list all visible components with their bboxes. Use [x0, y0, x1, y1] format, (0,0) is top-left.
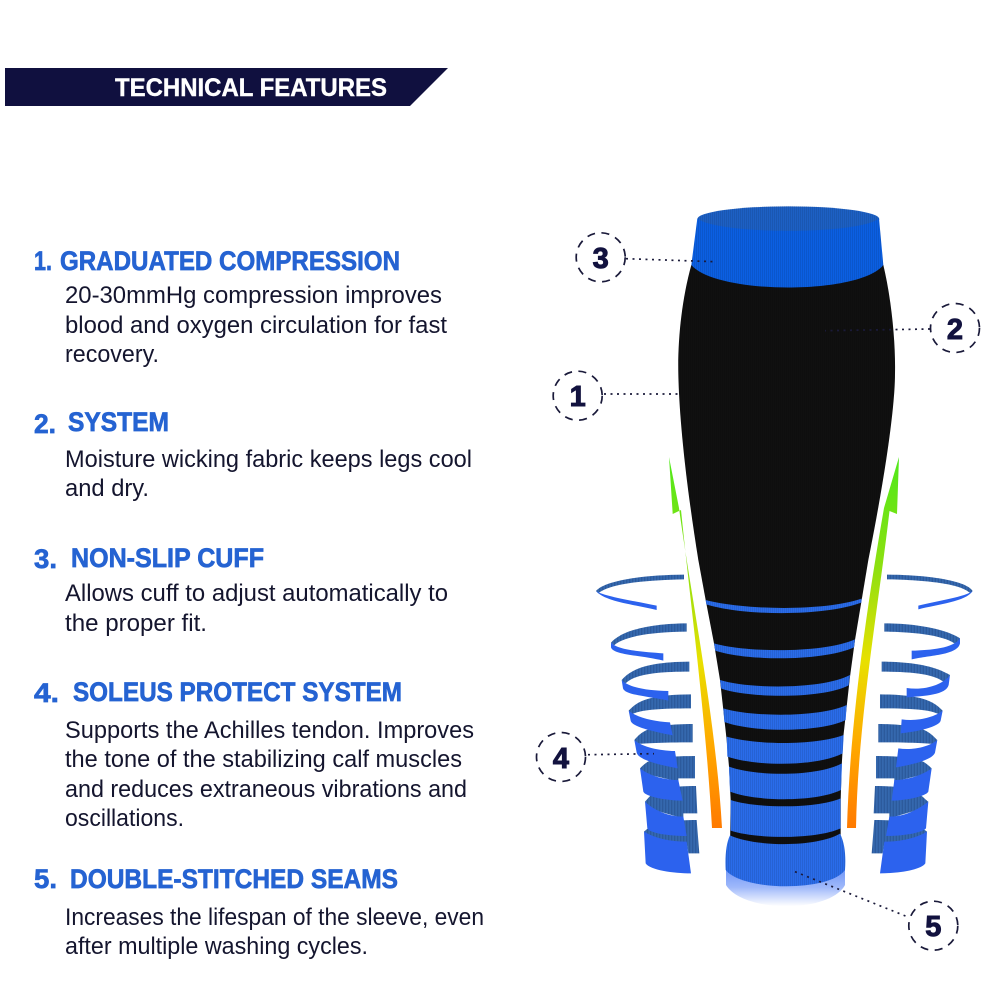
feature 2: system	[34, 407, 472, 502]
callout 1: compression	[553, 371, 678, 420]
feature 4: soleus protect system: and reduces extraneous vibrations and	[65, 776, 467, 803]
feature 5: double-stitched seams: after multiple washing cycles.	[65, 933, 368, 960]
left upward arrow	[669, 457, 722, 828]
feature 3: non-slip cuff: the proper fit.	[65, 610, 207, 637]
feature 4: soleus protect system: 4.	[34, 678, 59, 708]
feature 3: non-slip cuff: Allows cuff to adjust automatically to	[65, 580, 448, 607]
feature 4: soleus protect system: Supports the Achilles tendon. Improves	[65, 717, 474, 744]
bottom cuff reflection	[726, 868, 845, 906]
feature 5: double-stitched seams: DOUBLE-STITCHED SEAMS	[70, 864, 398, 894]
feature 4: soleus protect system	[34, 677, 474, 832]
bottom cuff	[725, 834, 845, 886]
left coil ring 3	[622, 662, 689, 701]
right coil ring 2	[884, 623, 960, 659]
feature 4: soleus protect system: the tone of the stabilizing calf muscles	[65, 746, 462, 773]
callout 5: seams: 5	[925, 911, 941, 943]
left coil ring 1	[596, 575, 684, 610]
feature 1: graduated compression	[34, 246, 447, 368]
right compression coil	[872, 575, 973, 873]
callout 3: cuff: 3	[593, 243, 609, 275]
callout 1: compression: 1	[570, 381, 586, 413]
feature 1: graduated compression: blood and oxygen circulation for fast	[65, 312, 447, 339]
feature 2: system: 2.	[34, 409, 56, 439]
right upward arrow	[847, 457, 899, 828]
right coil ring 4	[880, 694, 943, 733]
feature 2: system: Moisture wicking fabric keeps legs cool	[65, 446, 472, 473]
sleeve black body	[678, 265, 895, 853]
feature 2: system: SYSTEM	[68, 407, 169, 437]
callout 2: system: 2	[947, 314, 963, 346]
feature 1: graduated compression: 20-30mmHg compression improves	[65, 282, 442, 309]
feature 4: soleus protect system: SOLEUS PROTECT SYSTEM	[73, 677, 402, 707]
feature 5: double-stitched seams	[34, 864, 484, 960]
feature 3: non-slip cuff: NON-SLIP CUFF	[71, 543, 264, 573]
feature 2: system: and dry.	[65, 475, 149, 502]
callout 5: seams	[795, 872, 958, 950]
top cuff band	[691, 218, 883, 287]
right coil ring 8	[872, 820, 927, 873]
feature 3: non-slip cuff	[34, 543, 448, 637]
title banner	[5, 68, 448, 106]
feature 1: graduated compression: recovery.	[65, 341, 159, 368]
right coil ring 1	[887, 575, 973, 609]
left coil ring 7	[645, 786, 697, 836]
title banner: TECHNICAL FEATURES	[115, 74, 387, 102]
callout 4: soleus protection: 4	[553, 743, 569, 775]
feature 5: double-stitched seams: 5.	[34, 864, 57, 894]
left coil ring 2	[611, 623, 687, 661]
left coil ring 5	[634, 724, 693, 768]
feature 3: non-slip cuff: 3.	[34, 544, 57, 574]
right coil ring 3	[882, 662, 950, 697]
rib texture	[678, 206, 895, 886]
sleeve stripes	[706, 599, 862, 906]
callout 3: cuff	[576, 233, 715, 282]
feature 4: soleus protect system: oscillations.	[65, 805, 184, 832]
right coil ring 7	[874, 786, 928, 836]
compression sleeve	[678, 206, 895, 906]
left coil ring 4	[629, 694, 691, 735]
feature 1: graduated compression: GRADUATED COMPRESSION	[60, 246, 400, 276]
right coil ring 6	[876, 756, 932, 801]
right coil ring 5	[878, 724, 937, 767]
left coil ring 8	[644, 820, 699, 873]
callout 4: soleus protection	[536, 732, 654, 782]
feature 5: double-stitched seams: Increases the lifespan of the sleeve, even	[65, 904, 484, 931]
callout 2: system	[825, 304, 980, 352]
feature 1: graduated compression: 1.	[34, 246, 52, 276]
left coil ring 6	[640, 756, 695, 801]
top cuff inner	[697, 206, 879, 232]
left compression coil	[596, 575, 699, 873]
